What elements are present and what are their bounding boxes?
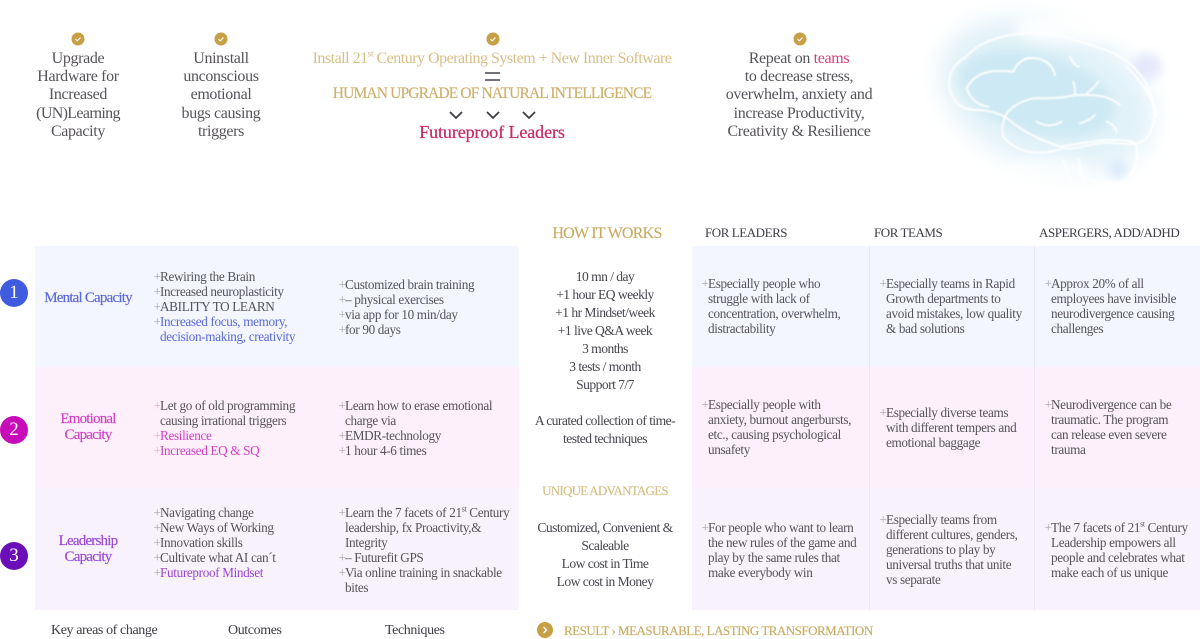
outcomes: mental: Increased neuroplasticity xyxy=(160,284,284,298)
outcomes: emotional: Let go of old programming xyxy=(160,398,295,412)
techniques: leadership: Integrity xyxy=(345,534,387,550)
techniques: mental: Customized brain training xyxy=(345,276,474,292)
panel: mental capacity: + xyxy=(154,314,161,328)
outcomes: leadership: New Ways of Working xyxy=(160,520,274,534)
outcomes: emotional: causing irrational triggers xyxy=(160,412,286,428)
text: teams mental xyxy=(880,276,1022,336)
text: leaders leadership: play by the same rules that xyxy=(708,550,840,564)
text: teams mental: avoid mistakes, low quality xyxy=(886,306,1022,320)
text: upgrade hardware: Hardware for xyxy=(37,68,119,85)
icon: three chevrons xyxy=(449,111,536,120)
heading: futureproof leaders: Futureproof Leaders xyxy=(419,122,565,142)
panel: audience row mental xyxy=(692,246,1200,367)
text: repeat on teams: increase Productivity, xyxy=(734,105,864,122)
text: how it works details: +1 live Q&A week xyxy=(558,323,652,338)
panel: audience row mental: + xyxy=(702,276,709,290)
label: leadership capacity: Leadership xyxy=(59,533,117,549)
text: teams mental: Growth departments to xyxy=(886,290,1000,306)
text: result: RESULT › MEASURABLE, LASTING TRANSFORMATION xyxy=(564,623,873,638)
text: neurodivergent mental: neurodivergence causing xyxy=(1051,306,1174,320)
footer label: techniques: Techniques xyxy=(385,623,445,638)
text: neurodivergent leadership xyxy=(1044,519,1188,580)
label: emotional capacity xyxy=(60,411,116,443)
text: advantages list xyxy=(537,520,673,589)
panel: emotional capacity: + xyxy=(154,442,161,458)
text: leaders emotional: anxiety, burnout angerbursts, xyxy=(708,412,851,426)
text: curated techniques xyxy=(535,413,676,446)
heading: for teams: FOR TEAMS xyxy=(874,225,942,240)
panel: mental capacity: + xyxy=(154,268,161,284)
text: leaders emotional: Especially people with xyxy=(708,396,821,412)
panel: leadership capacity: + xyxy=(338,564,346,580)
outcomes: leadership xyxy=(154,504,276,580)
footer label: key areas of change: Key areas of change xyxy=(51,623,157,638)
text: leaders leadership: For people who want to learn xyxy=(708,520,853,534)
text: neurodivergent emotional: trauma xyxy=(1051,442,1086,456)
panel: mental capacity xyxy=(35,246,519,367)
text: curated techniques: A curated collection of time- xyxy=(535,413,675,428)
text: leaders emotional xyxy=(702,396,851,457)
panel: leadership capacity: + xyxy=(154,564,161,580)
text: teams leadership: different cultures, genders, xyxy=(886,526,1018,542)
text: neurodivergent mental: Approx 20% of all xyxy=(1051,276,1144,290)
text: neurodivergent mental: challenges xyxy=(1051,320,1103,336)
panel: audience row leadership xyxy=(692,488,1200,610)
text: uninstall bugs xyxy=(182,50,260,140)
heading: how it works: HOW IT WORKS xyxy=(552,225,662,242)
text: teams leadership: Especially teams from xyxy=(886,512,997,526)
heading: aspergers add adhd: ASPERGERS, ADD/ADHD xyxy=(1039,225,1179,240)
techniques: mental: – physical exercises xyxy=(345,292,444,306)
text: leaders mental xyxy=(702,276,840,336)
techniques: mental: via app for 10 min/day xyxy=(345,306,458,322)
panel: mental capacity: + xyxy=(338,306,346,322)
number badge 1: 1 xyxy=(9,282,19,303)
panel: audience row emotional: + xyxy=(880,404,887,420)
equals sign xyxy=(485,72,500,81)
text: teams leadership: generations to play by xyxy=(886,542,995,556)
text: teams mental: Especially teams in Rapid xyxy=(886,276,1015,290)
number badge 1 xyxy=(0,279,28,307)
outcomes: emotional xyxy=(154,398,296,458)
text: how it works details: +1 hr Mindset/week xyxy=(555,305,655,320)
label: leadership capacity: Capacity xyxy=(65,549,111,565)
techniques: emotional: charge via xyxy=(345,412,396,428)
text: neurodivergent leadership: make each of us unique xyxy=(1051,564,1168,580)
techniques: leadership: Learn the 7 facets of 21st Century xyxy=(345,504,509,520)
text: leaders emotional: unsafety xyxy=(708,442,750,456)
text: leaders leadership: the new rules of the game and xyxy=(708,534,856,550)
techniques: emotional: 1 hour 4-6 times xyxy=(345,442,426,458)
panel: mental capacity: + xyxy=(154,284,161,298)
text: uninstall bugs: bugs causing xyxy=(182,105,260,122)
text: curated techniques: tested techniques xyxy=(563,431,647,446)
text: how it works details: 3 tests / month xyxy=(569,359,641,374)
text: teams leadership: universal truths that unite xyxy=(886,556,1011,572)
techniques: mental xyxy=(338,276,474,337)
text: how it works details: Support 7/7 xyxy=(576,377,634,392)
outcomes: emotional: Resilience xyxy=(160,428,212,442)
number badge 3 xyxy=(0,542,28,570)
text: upgrade hardware: Capacity xyxy=(51,123,105,140)
text: teams emotional: Especially diverse teams xyxy=(886,404,1008,420)
text: how it works details xyxy=(555,269,656,392)
panel: leadership capacity: + xyxy=(154,504,161,520)
text: neurodivergent leadership: The 7 facets of 21st Century xyxy=(1051,519,1188,534)
text: advantages list: Customized, Convenient & xyxy=(537,520,673,535)
footer label: outcomes: Outcomes xyxy=(228,623,282,638)
text: leaders emotional: etc., causing psychological xyxy=(708,426,841,442)
text: leaders leadership: make everybody win xyxy=(708,564,812,580)
panel: leadership capacity xyxy=(35,488,519,610)
techniques: emotional: EMDR-technology xyxy=(345,428,441,442)
panel: emotional capacity: + xyxy=(338,398,346,412)
text: leaders leadership xyxy=(702,520,857,580)
panel: leadership capacity: + xyxy=(154,550,161,564)
text: repeat on teams: to decrease stress, xyxy=(745,68,853,85)
panel: audience row leadership: + xyxy=(880,512,887,526)
panel: audience row leadership: + xyxy=(702,520,709,534)
text: advantages list: Low cost in Time xyxy=(562,556,648,571)
text: neurodivergent emotional: can release even severe xyxy=(1051,426,1167,442)
text: upgrade hardware: Increased xyxy=(49,86,107,103)
panel: emotional capacity: + xyxy=(338,442,346,458)
panel: audience row emotional: + xyxy=(702,396,709,412)
icon: check badge 3 xyxy=(486,32,500,46)
label: emotional capacity: Capacity xyxy=(65,427,111,443)
panel: emotional capacity: + xyxy=(338,428,346,442)
icon: check badge 1 xyxy=(72,32,84,46)
outcomes: mental: ABILITY TO LEARN xyxy=(160,298,274,314)
text: repeat on teams: Repeat on teams xyxy=(749,50,849,67)
techniques: leadership: bites xyxy=(345,580,368,594)
text: neurodivergent mental: employees have invisible xyxy=(1051,290,1176,306)
panel: mental capacity: + xyxy=(338,292,346,306)
panel: mental capacity: + xyxy=(154,298,161,314)
label: leadership capacity xyxy=(59,533,118,565)
text: teams leadership xyxy=(880,512,1018,587)
text: uninstall bugs: Uninstall xyxy=(193,50,249,67)
techniques: emotional xyxy=(338,398,492,458)
panel: audience row leadership: + xyxy=(1044,520,1052,534)
outcomes: leadership: Navigating change xyxy=(160,504,253,520)
outcomes: leadership: Cultivate what AI can´t xyxy=(160,550,276,564)
techniques: leadership: leadership, fx Proactivity,& xyxy=(345,520,481,534)
text: upgrade hardware xyxy=(36,50,120,140)
text: teams emotional: emotional baggage xyxy=(886,434,980,450)
techniques: leadership xyxy=(338,504,510,594)
text: teams emotional: with different tempers and xyxy=(886,420,1016,434)
text: upgrade hardware: (UN)Learning xyxy=(36,105,120,122)
text: uninstall bugs: emotional xyxy=(191,86,251,103)
text: advantages list: Scaleable xyxy=(581,538,629,553)
text: how it works details: 3 months xyxy=(582,341,628,356)
heading: human upgrade: HUMAN UPGRADE OF NATURAL INTELLIGENCE xyxy=(333,85,651,102)
text: uninstall bugs: unconscious xyxy=(183,68,259,85)
techniques: leadership: – Futurefit GPS xyxy=(345,550,423,564)
text: leaders mental: concentration, overwhelm, xyxy=(708,306,840,320)
outcomes: emotional: Increased EQ & SQ xyxy=(160,442,259,458)
panel: leadership capacity: + xyxy=(154,534,161,550)
number badge 2 xyxy=(0,416,28,444)
text: neurodivergent leadership: people and celebrates what xyxy=(1051,550,1185,564)
techniques: emotional: Learn how to erase emotional xyxy=(345,398,492,412)
panel: leadership capacity: + xyxy=(338,550,346,564)
panel: audience row emotional xyxy=(692,367,1200,488)
illustration: glowing brain xyxy=(934,12,1164,182)
text: install operating system: Install 21st Century Operating System + New Inner Software xyxy=(313,49,671,67)
heading: for leaders: FOR LEADERS xyxy=(705,225,787,240)
text: neurodivergent emotional: traumatic. The program xyxy=(1051,412,1168,426)
panel: emotional capacity: + xyxy=(154,398,161,412)
outcomes: mental: decision-making, creativity xyxy=(160,328,295,344)
outcomes: mental: Rewiring the Brain xyxy=(160,268,255,284)
techniques: leadership: Via online training in snackable xyxy=(345,564,502,580)
label: mental capacity: Mental Capacity xyxy=(44,290,132,306)
outcomes: mental: Increased focus, memory, xyxy=(160,314,287,328)
text: neurodivergent leadership: Leadership empowers all xyxy=(1051,534,1176,550)
panel: emotional capacity xyxy=(35,367,519,488)
number badge 3: 3 xyxy=(9,545,19,566)
panel: mental capacity: + xyxy=(338,276,346,292)
text: neurodivergent mental xyxy=(1044,276,1176,336)
panel: leadership capacity: + xyxy=(154,520,161,534)
techniques: mental: for 90 days xyxy=(345,322,401,336)
outcomes: leadership: Innovation skills xyxy=(160,534,243,550)
icon: check badge 4 xyxy=(794,32,806,46)
panel: mental capacity: + xyxy=(338,322,346,336)
text: leaders mental: Especially people who xyxy=(708,276,820,290)
number badge 2: 2 xyxy=(9,419,19,440)
label: emotional capacity: Emotional xyxy=(60,411,116,427)
text: teams emotional xyxy=(880,404,1017,450)
text: repeat on teams: Creativity & Resilience xyxy=(727,123,871,140)
icon: check badge 2 xyxy=(214,32,228,46)
text: teams leadership: vs separate xyxy=(886,572,940,586)
text: repeat on teams: overwhelm, anxiety and xyxy=(726,86,872,103)
panel: audience row emotional: + xyxy=(1044,396,1052,412)
text: leaders mental: distractability xyxy=(708,320,775,336)
heading: unique advantages: UNIQUE ADVANTAGES xyxy=(542,483,668,498)
text: neurodivergent emotional xyxy=(1044,396,1172,456)
text: advantages list: Low cost in Money xyxy=(557,574,653,589)
text: neurodivergent emotional: Neurodivergence can be xyxy=(1051,396,1171,412)
text: repeat on teams xyxy=(726,50,872,140)
panel: audience row mental: + xyxy=(880,276,887,290)
text: upgrade hardware: Upgrade xyxy=(52,50,104,67)
text: uninstall bugs: triggers xyxy=(198,123,244,140)
text: how it works details: 10 mn / day xyxy=(576,269,634,284)
panel: audience row mental: + xyxy=(1044,276,1052,290)
panel: emotional capacity: + xyxy=(154,428,161,442)
text: teams mental: & bad solutions xyxy=(886,320,964,336)
text: leaders mental: struggle with lack of xyxy=(708,290,810,306)
icon: result chevron badge xyxy=(537,622,553,638)
text: how it works details: +1 hour EQ weekly xyxy=(556,287,654,302)
panel: leadership capacity: + xyxy=(338,504,346,520)
outcomes: leadership: Futureproof Mindset xyxy=(160,564,263,580)
outcomes: mental xyxy=(154,268,296,344)
